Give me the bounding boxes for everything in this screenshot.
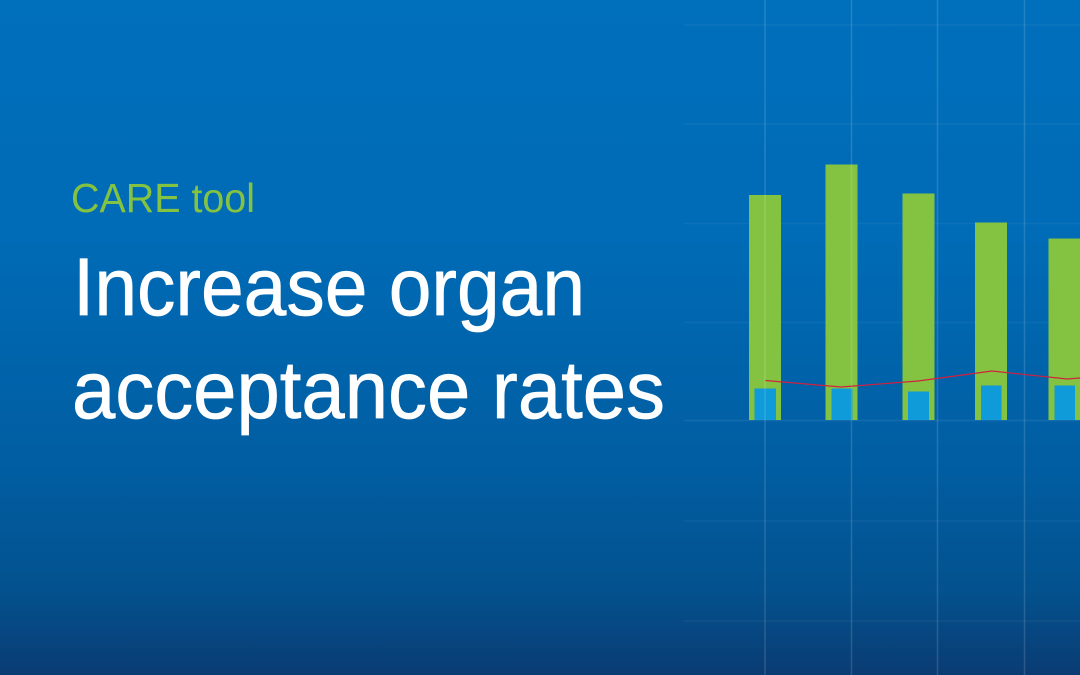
title: Increase organ acceptance rates: acceptance rates xyxy=(72,345,665,436)
red trend line xyxy=(766,371,1080,387)
blue bars xyxy=(754,386,1075,420)
eyebrow: CARE tool: CARE tool xyxy=(71,175,255,221)
green bars xyxy=(749,164,1080,420)
title: Increase organ acceptance rates: Increase organ xyxy=(73,242,585,333)
bar chart xyxy=(684,0,1080,675)
baseline and vertical grid lines xyxy=(684,0,1080,675)
title: Increase organ acceptance rates xyxy=(72,242,665,436)
